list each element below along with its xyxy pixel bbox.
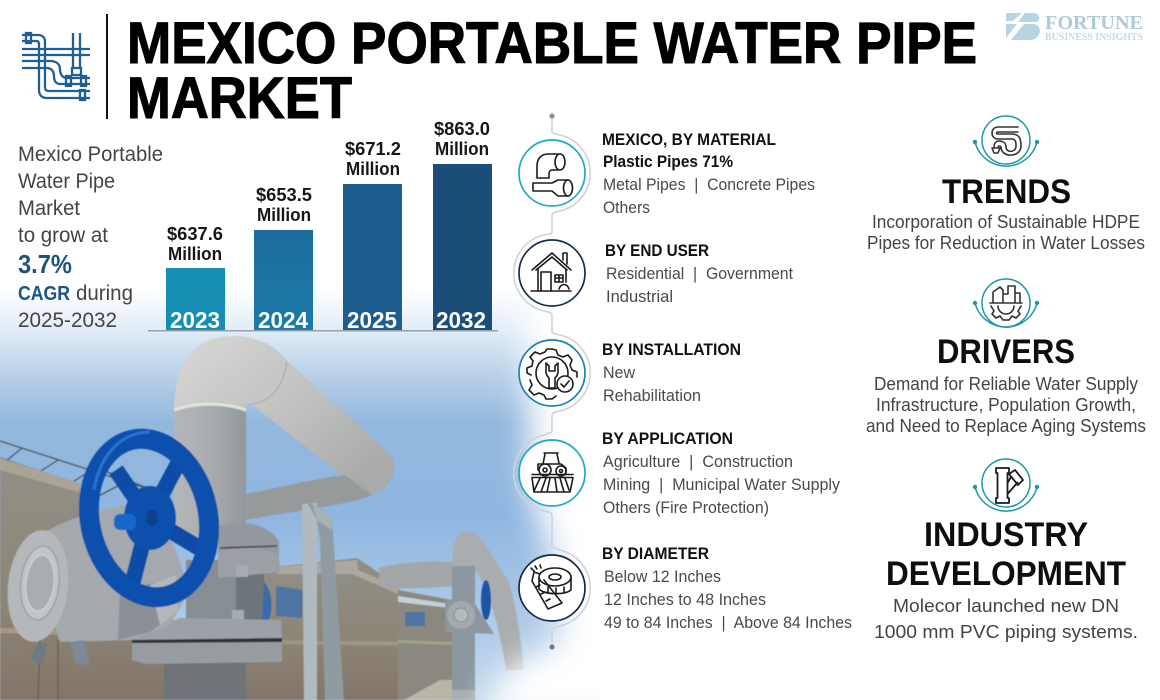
valve body xyxy=(186,560,264,624)
segment: by installation: New xyxy=(603,364,635,382)
icon: house xyxy=(519,240,585,306)
flanges xyxy=(218,523,279,565)
drivers text xyxy=(866,333,1146,436)
growth statement: 2025-2032 xyxy=(18,309,117,332)
far gearbox and wheel xyxy=(445,600,494,634)
segment: by diameter: Below 12 Inches xyxy=(604,568,721,586)
title xyxy=(127,11,977,131)
back wall xyxy=(246,558,400,700)
icon: trends xyxy=(973,116,1039,166)
bar 2023 xyxy=(166,224,225,333)
lower pipe xyxy=(164,660,246,700)
segment: by application xyxy=(602,429,841,517)
bar 2025 xyxy=(343,139,402,333)
segment: by diameter: BY DIAMETER xyxy=(602,544,709,563)
segment: by end user: Residential | Government xyxy=(606,265,793,283)
photo: valve and pipes against sky xyxy=(0,270,700,700)
bar 2032 xyxy=(433,119,492,333)
segment: by diameter: 12 Inches to 48 Inches xyxy=(604,591,766,609)
timeline connector xyxy=(514,114,590,650)
industry development text xyxy=(874,516,1138,642)
segment: by material: Metal Pipes | Concrete Pipes xyxy=(603,176,815,194)
main vertical pipe xyxy=(174,406,246,540)
bar 2032: Million xyxy=(435,139,489,159)
icon: drivers xyxy=(973,279,1039,327)
industry development text: 1000 mm PVC piping systems. xyxy=(874,622,1138,642)
segment: by application: Others (Fire Protection) xyxy=(603,499,769,517)
ground xyxy=(404,680,470,700)
growth statement: 3.7% xyxy=(18,249,72,279)
icon: pipes header xyxy=(22,33,90,100)
segment: by material: MEXICO, BY MATERIAL xyxy=(602,130,776,149)
drivers text: DRIVERS xyxy=(937,333,1075,371)
bar 2024: 2024 xyxy=(258,307,308,333)
title: MEXICO PORTABLE WATER PIPE xyxy=(127,11,977,76)
main pipe arch xyxy=(174,336,394,520)
title: MARKET xyxy=(127,66,352,131)
drivers text: Infrastructure, Population Growth, xyxy=(876,395,1136,415)
segment: by installation: BY INSTALLATION xyxy=(602,340,741,359)
segment: by material: Plastic Pipes 71% xyxy=(603,152,733,171)
icon: material pipes xyxy=(519,140,585,206)
logo: Fortune Business Insights: FORTUNE xyxy=(1045,12,1143,34)
blue lettering xyxy=(276,586,303,618)
far pipe arch xyxy=(452,531,524,700)
bar 2025: 2025 xyxy=(347,307,397,333)
segment: by application: Agriculture | Construction xyxy=(603,453,793,471)
segment: by installation: Rehabilitation xyxy=(603,387,701,405)
growth statement: CAGR xyxy=(18,283,70,305)
stand frame xyxy=(302,503,317,700)
segment: by diameter: 49 to 84 Inches | Above 84 Inches xyxy=(604,614,852,632)
divider xyxy=(106,14,108,119)
growth statement xyxy=(18,143,163,332)
bar 2024 xyxy=(254,185,313,333)
industry development text: INDUSTRY xyxy=(924,516,1088,554)
bar 2032: $863.0 xyxy=(434,119,490,139)
bar chart xyxy=(148,119,498,333)
drivers text: and Need to Replace Aging Systems xyxy=(866,416,1146,436)
logo: Fortune Business Insights: BUSINESS INSIGHTS xyxy=(1045,32,1143,43)
icon: measuring tape xyxy=(519,555,585,621)
bar 2025: Million xyxy=(346,159,400,179)
logo: Fortune Business Insights xyxy=(1006,12,1143,43)
bar 2023: 2023 xyxy=(170,307,220,333)
far horizontal pipe xyxy=(379,561,452,588)
segment: by end user xyxy=(605,241,793,306)
icon: gear wrench xyxy=(519,340,585,406)
grating xyxy=(0,441,152,498)
icon: tractor in field xyxy=(519,440,585,506)
fade into white xyxy=(480,270,700,700)
gearbox xyxy=(26,506,190,642)
bar 2024: $653.5 xyxy=(256,185,312,205)
bar 2024: Million xyxy=(257,205,311,225)
industry development text: DEVELOPMENT xyxy=(886,555,1126,593)
segment: by diameter xyxy=(602,544,852,632)
segment: by material: Others xyxy=(603,199,650,217)
bar 2025: $671.2 xyxy=(345,139,401,159)
left wall xyxy=(0,470,175,700)
drivers text: Demand for Reliable Water Supply xyxy=(874,374,1138,394)
blue hand wheel xyxy=(75,427,223,609)
growth statement: during xyxy=(76,282,133,305)
segment: by material xyxy=(602,130,815,217)
segment: by end user: BY END USER xyxy=(605,241,709,260)
growth statement: Market xyxy=(18,197,80,220)
growth statement: Mexico Portable xyxy=(18,143,163,166)
trends text: Incorporation of Sustainable HDPE xyxy=(872,212,1140,232)
bar 2032: 2032 xyxy=(436,307,486,333)
segment: by application: Mining | Municipal Water Supply xyxy=(603,476,841,494)
growth statement: Water Pipe xyxy=(18,170,115,193)
segment: by installation xyxy=(602,340,741,405)
trends text xyxy=(867,173,1145,253)
bar 2023: $637.6 xyxy=(167,224,223,244)
trends text: Pipes for Reduction in Water Losses xyxy=(867,233,1145,253)
segment: by end user: Industrial xyxy=(606,288,673,306)
trends text: TRENDS xyxy=(942,173,1071,211)
industry development text: Molecor launched new DN xyxy=(893,596,1119,616)
growth statement: to grow at xyxy=(18,224,108,247)
bar 2023: Million xyxy=(168,244,222,264)
icon: industry development xyxy=(973,459,1039,511)
segment: by application: BY APPLICATION xyxy=(602,429,733,448)
